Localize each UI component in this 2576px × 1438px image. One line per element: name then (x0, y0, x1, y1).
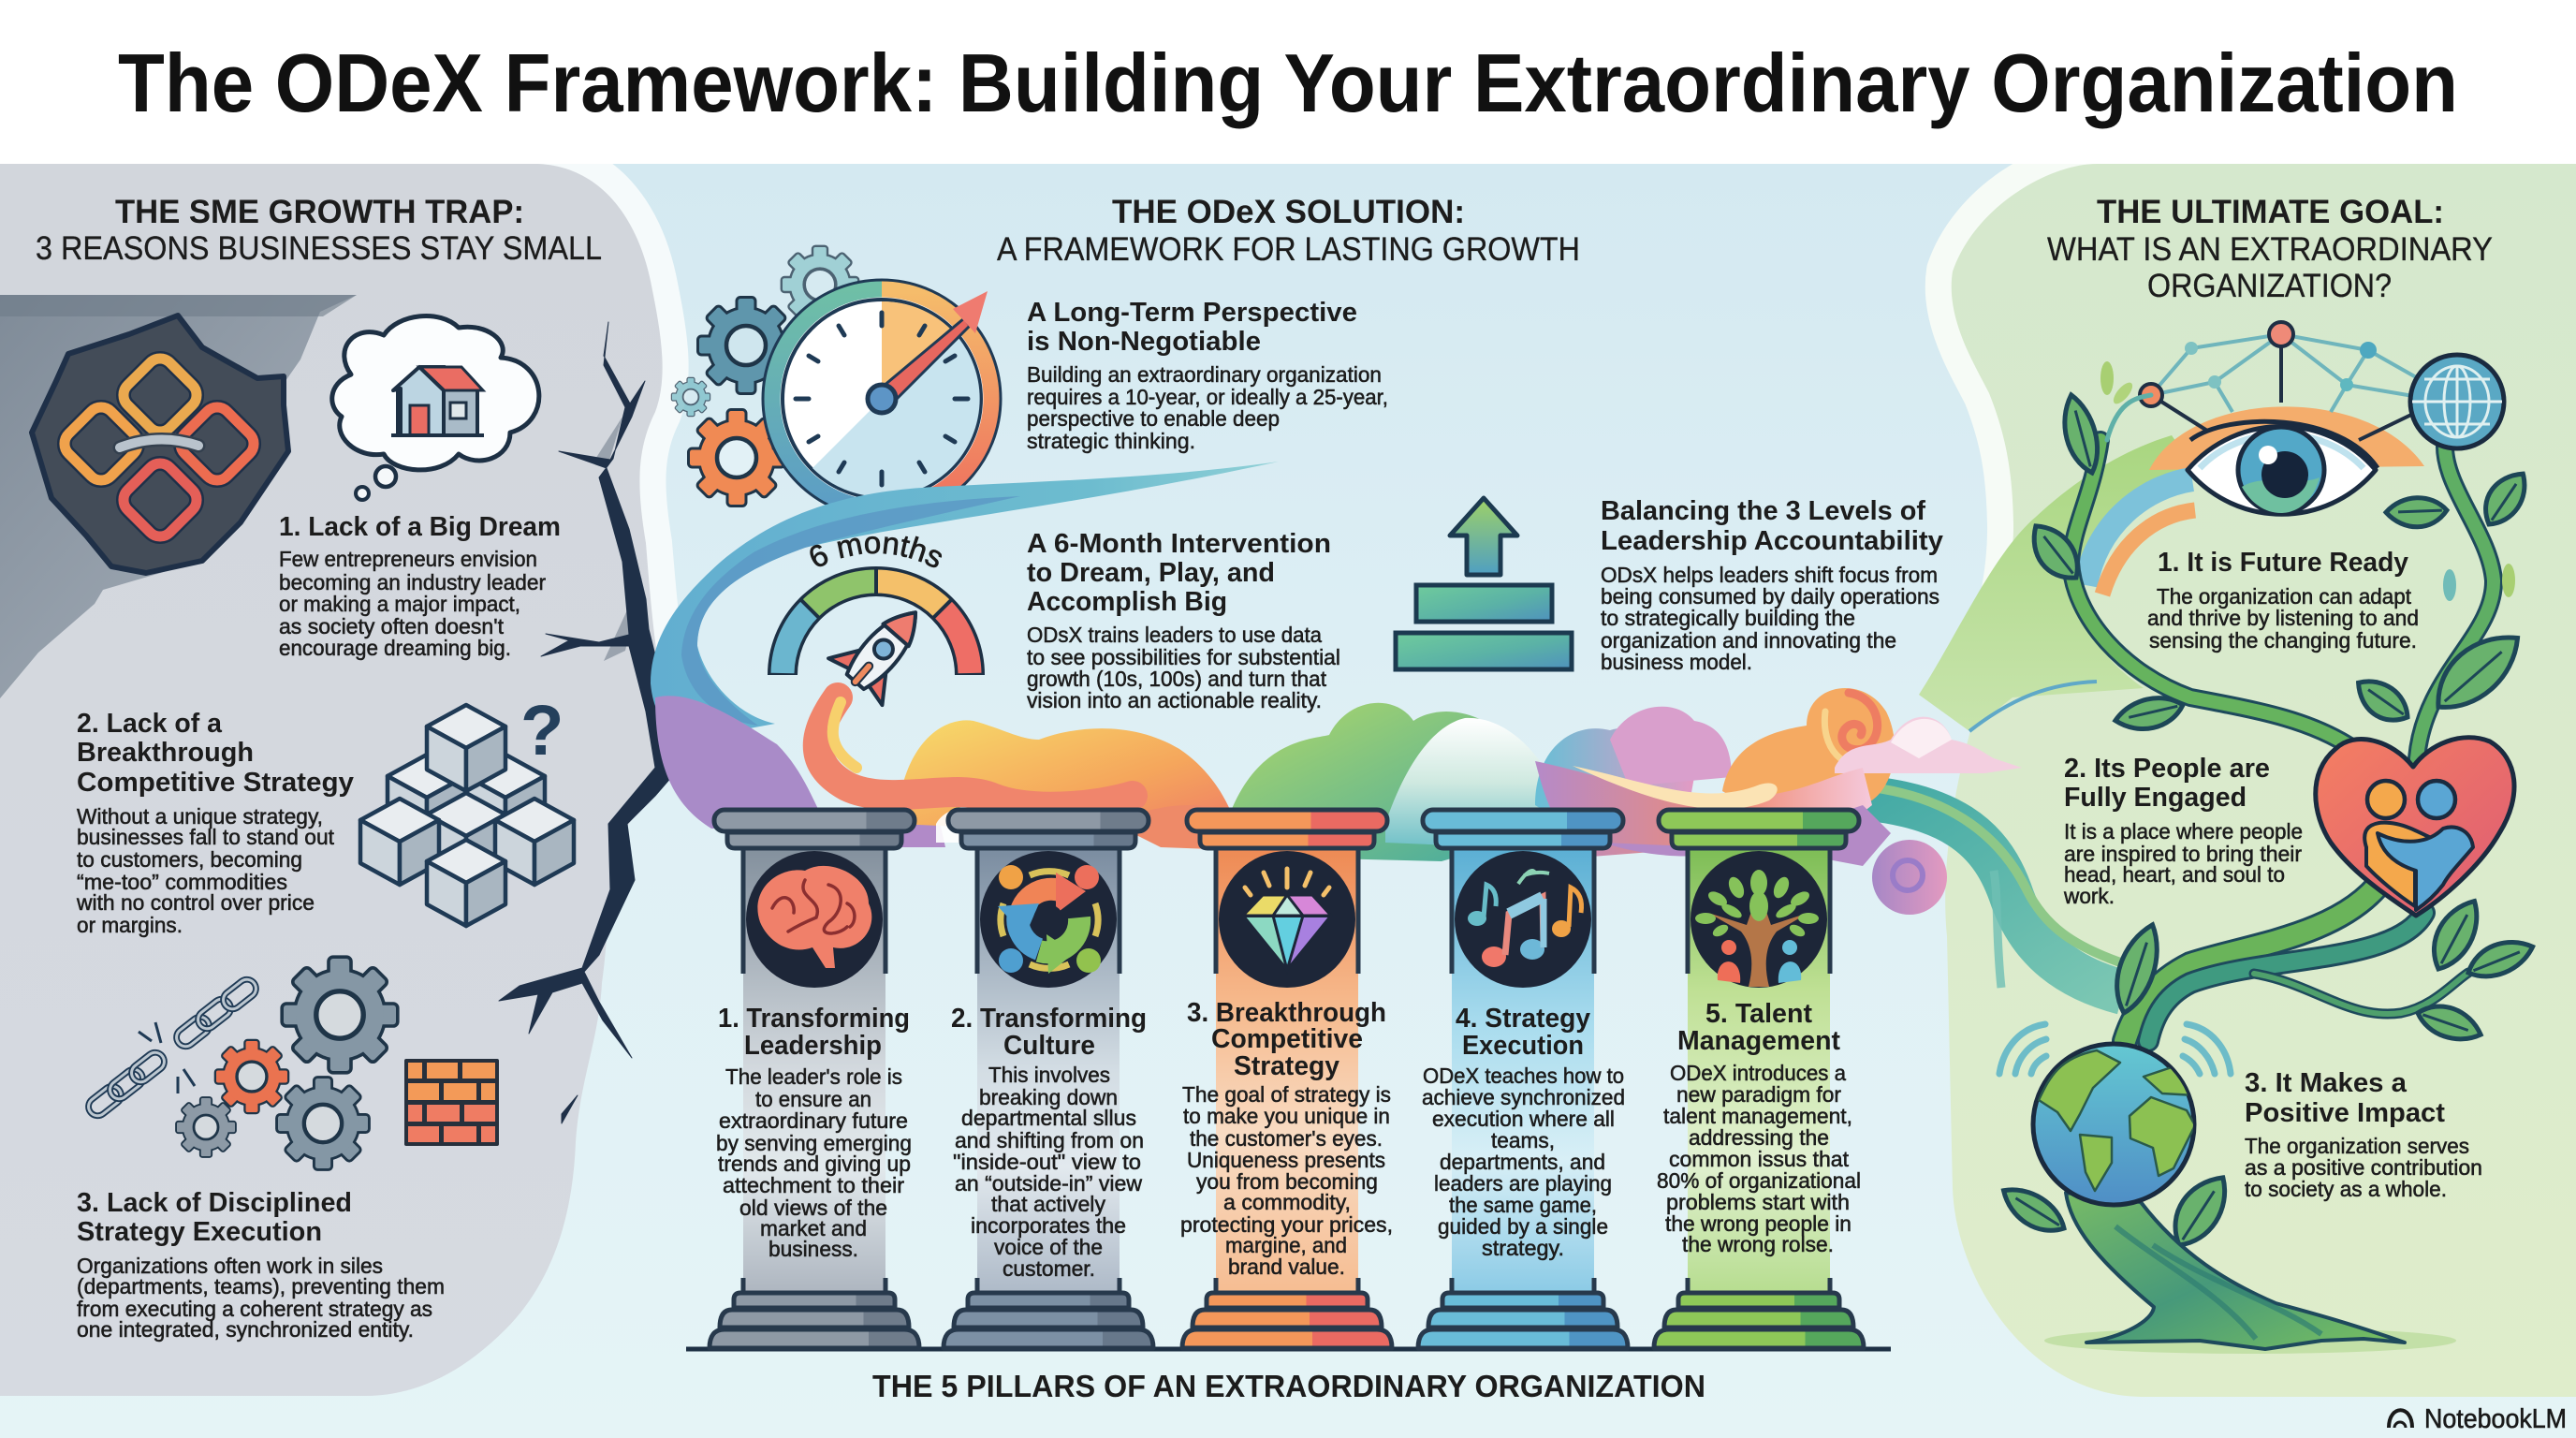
pillar text: customer. (1003, 1256, 1095, 1281)
leadership accountability text: business model. (1601, 650, 1752, 674)
pillar text: protecting your prices, (1180, 1212, 1393, 1237)
pillar text: leaders are playing (1434, 1171, 1612, 1196)
leadership accountability text (1601, 496, 1943, 674)
goal 3 text: The organization serves (2245, 1134, 2469, 1158)
icon: earth globe with signal waves (1999, 1024, 2231, 1205)
icon: diamond (1219, 851, 1355, 988)
section heading (997, 194, 1580, 268)
pillar text: that actively (991, 1192, 1105, 1216)
pillar text: departments, and (1440, 1150, 1605, 1174)
icon: rotating culture arrows (980, 851, 1117, 988)
long-term perspective text: requires a 10-year, or ideally a 25-year, (1027, 385, 1388, 409)
icon: globe (2410, 355, 2504, 448)
goal 1 text: 1. It is Future Ready (2158, 548, 2408, 578)
icon: arrow rising above level bars (1396, 498, 1572, 669)
icon: tree trunk and roots (2044, 1193, 2456, 1354)
goal 3 text: Positive Impact (2245, 1098, 2445, 1128)
long-term perspective text: is Non-Negotiable (1027, 327, 1261, 357)
goal 3 text: 3. It Makes a (2245, 1068, 2408, 1098)
pillar text: "inside-out" view to (953, 1150, 1141, 1174)
leadership accountability text: Leadership Accountability (1601, 526, 1943, 556)
reason 3 text: Strategy Execution (77, 1217, 322, 1247)
pillar 1: transforming leadership (710, 810, 919, 1348)
panel: ODeX solution (651, 194, 2160, 1403)
pillar structure (1418, 810, 1628, 1348)
pillar text: and shifting from on (955, 1128, 1144, 1152)
pillar text: Culture (1003, 1031, 1095, 1061)
six-month intervention text: to Dream, Play, and (1027, 558, 1275, 588)
pillar text: problems start with (1666, 1190, 1850, 1214)
long-term perspective text: Building an extraordinary organization (1027, 362, 1382, 387)
pillar text: 3. Breakthrough (1187, 998, 1386, 1028)
pillar structure (944, 810, 1153, 1348)
panel: SME growth trap (0, 164, 691, 1396)
reason 2 text: Breakthrough (77, 738, 254, 768)
pillar text: to ensure an (755, 1087, 871, 1111)
long-term perspective text: perspective to enable deep (1027, 406, 1280, 431)
green hill and rainbow (1919, 406, 2424, 731)
leadership accountability text: to strategically building the (1601, 606, 1855, 630)
goal 2 text: head, heart, and soul to (2064, 862, 2285, 887)
pillar text: extraordinary future (719, 1108, 908, 1133)
pillar text: a commodity, (1223, 1190, 1351, 1214)
section heading: THE ODeX SOLUTION: (1112, 194, 1465, 230)
long-term perspective text: strategic thinking. (1027, 429, 1195, 453)
icon: eye (2188, 421, 2378, 514)
pillar text: achieve synchronized (1422, 1085, 1625, 1109)
goal 2 text (2063, 754, 2303, 908)
reason 1 text: 1. Lack of a Big Dream (279, 512, 561, 542)
pillar text: Management (1677, 1026, 1840, 1056)
pillar text: guided by a single (1438, 1214, 1608, 1239)
leaves (1996, 361, 2538, 1255)
reason 3 text: 3. Lack of Disciplined (77, 1188, 352, 1218)
pillar text: to make you unique in (1183, 1104, 1390, 1128)
leadership accountability text: Balancing the 3 Levels of (1601, 496, 1925, 526)
goal 1 text: The organization can adapt (2157, 584, 2412, 609)
panel shape (0, 164, 676, 1396)
section heading: THE ULTIMATE GOAL: (2097, 194, 2444, 230)
reason 2 text: or margins. (77, 913, 183, 937)
rock face (0, 295, 357, 698)
six-month intervention text: ODsX trains leaders to use data (1027, 623, 1322, 647)
pillar text: common issus that (1669, 1147, 1850, 1171)
pillar text: attechment to their (723, 1173, 904, 1197)
pillar text: The leader's role is (725, 1064, 902, 1089)
long-term perspective text (1027, 298, 1388, 453)
icon: broken chain ring (59, 353, 259, 542)
goal 3 text: as a positive contribution (2245, 1155, 2482, 1180)
pillar 5: talent management (1654, 810, 1864, 1348)
reason 3 text: (departments, teams), preventing them (77, 1274, 445, 1299)
vines (2071, 395, 2494, 1041)
goal 1 text (2147, 548, 2419, 653)
pillar text: 80% of organizational (1657, 1168, 1861, 1193)
pillar structure (710, 810, 919, 1348)
pillar text: new paradigm for (1676, 1082, 1841, 1107)
pillar text: departmental sllus (961, 1106, 1136, 1130)
pillar text: addressing the (1689, 1125, 1829, 1150)
pillar 2: transforming culture (944, 810, 1153, 1348)
goal 3 text: to society as a whole. (2245, 1177, 2447, 1201)
pillar text: breaking down (979, 1085, 1118, 1109)
pillar structure (1182, 810, 1392, 1348)
pillar text: Execution (1462, 1031, 1584, 1061)
pillar text (1657, 999, 1861, 1256)
pillar text (716, 1004, 912, 1261)
NotebookLM logo: NotebookLM (2424, 1404, 2567, 1434)
pillar 4: strategy execution (1418, 810, 1628, 1348)
six-month intervention text: Accomplish Big (1027, 587, 1227, 617)
icon: tree with people (1690, 851, 1827, 988)
pillar text: old views of the (739, 1196, 887, 1220)
reason 1 text: or making a major impact, (279, 592, 520, 616)
pillar text (1422, 1004, 1625, 1260)
section heading: A FRAMEWORK FOR LASTING GROWTH (997, 231, 1580, 268)
broken hole (32, 315, 288, 573)
panel: ultimate goal background (1945, 164, 2576, 1397)
reason 2 text: businesses fall to stand out (77, 825, 335, 849)
pillar text: 4. Strategy (1456, 1004, 1590, 1034)
pillar text: the wrong people in (1665, 1211, 1852, 1236)
pillar text: incorporates the (971, 1213, 1126, 1238)
goal 2 text: It is a place where people (2064, 819, 2303, 844)
pillar text: brand value. (1228, 1255, 1345, 1279)
title: The ODeX Framework: Building Your Extraordinary Organization (118, 37, 2458, 129)
pillar text: business. (768, 1237, 858, 1261)
reason 3 text: from executing a coherent strategy as (77, 1297, 432, 1321)
pillar text: The goal of strategy is (1182, 1082, 1391, 1107)
pillar text: Uniqueness presents (1187, 1148, 1385, 1172)
network above the eye (2140, 322, 2424, 440)
pillar text: Strategy (1234, 1051, 1339, 1081)
panel: ultimate goal content (1996, 194, 2538, 1354)
pillar text: by senving emerging (716, 1131, 912, 1155)
leadership accountability text: organization and innovating the (1601, 628, 1896, 653)
reason 2 text: 2. Lack of a (77, 709, 223, 739)
pillar text: ODeX introduces a (1670, 1061, 1846, 1085)
reason 1 text: Few entrepreneurs envision (279, 547, 537, 571)
icon: stack of cubes with question mark: ? (520, 691, 564, 770)
icon: heart with embracing people (2316, 738, 2514, 916)
icon: stack of cubes with question mark (360, 691, 574, 926)
leadership accountability text: ODsX helps leaders shift focus from (1601, 563, 1938, 587)
goal 3 text (2245, 1068, 2482, 1201)
section heading: ORGANIZATION? (2147, 268, 2392, 304)
ground line (686, 1346, 1891, 1352)
pillar text (951, 1004, 1147, 1281)
six-month intervention text (1027, 529, 1340, 712)
section heading: 3 REASONS BUSINESSES STAY SMALL (36, 230, 602, 267)
long-term perspective text: A Long-Term Perspective (1027, 298, 1357, 328)
reason 2 text: Competitive Strategy (77, 768, 354, 798)
reason 3 text (77, 1188, 445, 1342)
pillar text: ODeX teaches how to (1423, 1064, 1624, 1088)
pillar text: the customer's eyes. (1190, 1126, 1383, 1151)
reason 3 text: Organizations often work in siles (77, 1254, 383, 1278)
pillar text: teams, (1491, 1128, 1555, 1152)
pillar text: This involves (988, 1063, 1110, 1087)
pillar text: 5. Talent (1705, 999, 1812, 1029)
reason 1 text: as society often doesn't (279, 614, 505, 638)
pillar text: market and (760, 1216, 867, 1240)
pillar text: 2. Transforming (951, 1004, 1147, 1034)
section heading: WHAT IS AN EXTRAORDINARY (2047, 231, 2493, 268)
icon: broken chain, gears and brick wall (85, 959, 499, 1168)
pillar text: strategy. (1482, 1236, 1564, 1260)
pillar text: execution where all (1432, 1107, 1615, 1131)
reason 2 text: to customers, becoming (77, 847, 302, 872)
section heading (2047, 194, 2493, 304)
icon: clock with gears (672, 247, 1000, 517)
six-month intervention text: vision into an actionable reality. (1027, 688, 1322, 712)
pillar text (1180, 998, 1393, 1279)
reason 2 text: with no control over price (76, 890, 315, 915)
pillars caption: THE 5 PILLARS OF AN EXTRAORDINARY ORGANIZATION (872, 1369, 1705, 1403)
section heading (36, 194, 602, 267)
pillar text: the same game, (1449, 1193, 1597, 1217)
swoosh (651, 462, 1279, 736)
goal 1 text: and thrive by listening to and (2147, 606, 2419, 630)
pillar text: 1. Transforming (718, 1004, 910, 1034)
reason 1 text: encourage dreaming big. (279, 636, 511, 660)
icon: thought cloud with house (332, 316, 539, 500)
goal 2 text: 2. Its People are (2064, 754, 2270, 784)
icon: 6 months gauge: 6 months (810, 536, 942, 567)
crack (499, 322, 691, 1123)
reason 3 text: one integrated, synchronized entity. (77, 1317, 414, 1342)
icon: brain (746, 851, 883, 988)
river flowing into goal panel (1816, 786, 2123, 992)
pillar text: margine, and (1225, 1233, 1347, 1257)
pillar text: the wrong rolse. (1682, 1232, 1834, 1256)
pillar text: Competitive (1211, 1024, 1363, 1054)
pillar text: voice of the (994, 1235, 1103, 1259)
pillar text: trends and giving up (718, 1152, 911, 1176)
pillar 3: breakthrough competitive strategy (1180, 810, 1393, 1348)
icon: music notes (1455, 851, 1591, 988)
pillar text: talent management, (1663, 1104, 1852, 1128)
pillar text: Leadership (744, 1031, 882, 1061)
reason 1 text: becoming an industry leader (279, 570, 546, 594)
cloud and rainbow band (655, 688, 2022, 915)
section heading: THE SME GROWTH TRAP: (115, 194, 524, 230)
goal 1 text: sensing the changing future. (2149, 628, 2417, 653)
reason 2 text (76, 709, 354, 937)
icon: 6 months gauge (768, 536, 985, 675)
six-month intervention text: A 6-Month Intervention (1027, 529, 1331, 559)
icon: rocket (826, 589, 943, 708)
pillar text: an “outside-in” view (955, 1171, 1142, 1196)
six-month intervention text: to see possibilities for substential (1027, 645, 1340, 669)
goal 2 text: Fully Engaged (2064, 783, 2247, 813)
six-month intervention text: growth (10s, 100s) and turn that (1027, 667, 1327, 691)
goal 2 text: work. (2063, 884, 2115, 908)
leadership accountability text: being consumed by daily operations (1601, 584, 1939, 609)
reason 1 text (279, 512, 561, 660)
rock band (0, 295, 357, 316)
pillar structure (1654, 810, 1864, 1348)
pillar text: you from becoming (1196, 1169, 1378, 1194)
goal 2 text: are inspired to bring their (2064, 842, 2302, 866)
reason 2 text: “me-too” commodities (77, 870, 287, 894)
reason 2 text: Without a unique strategy, (77, 804, 323, 829)
